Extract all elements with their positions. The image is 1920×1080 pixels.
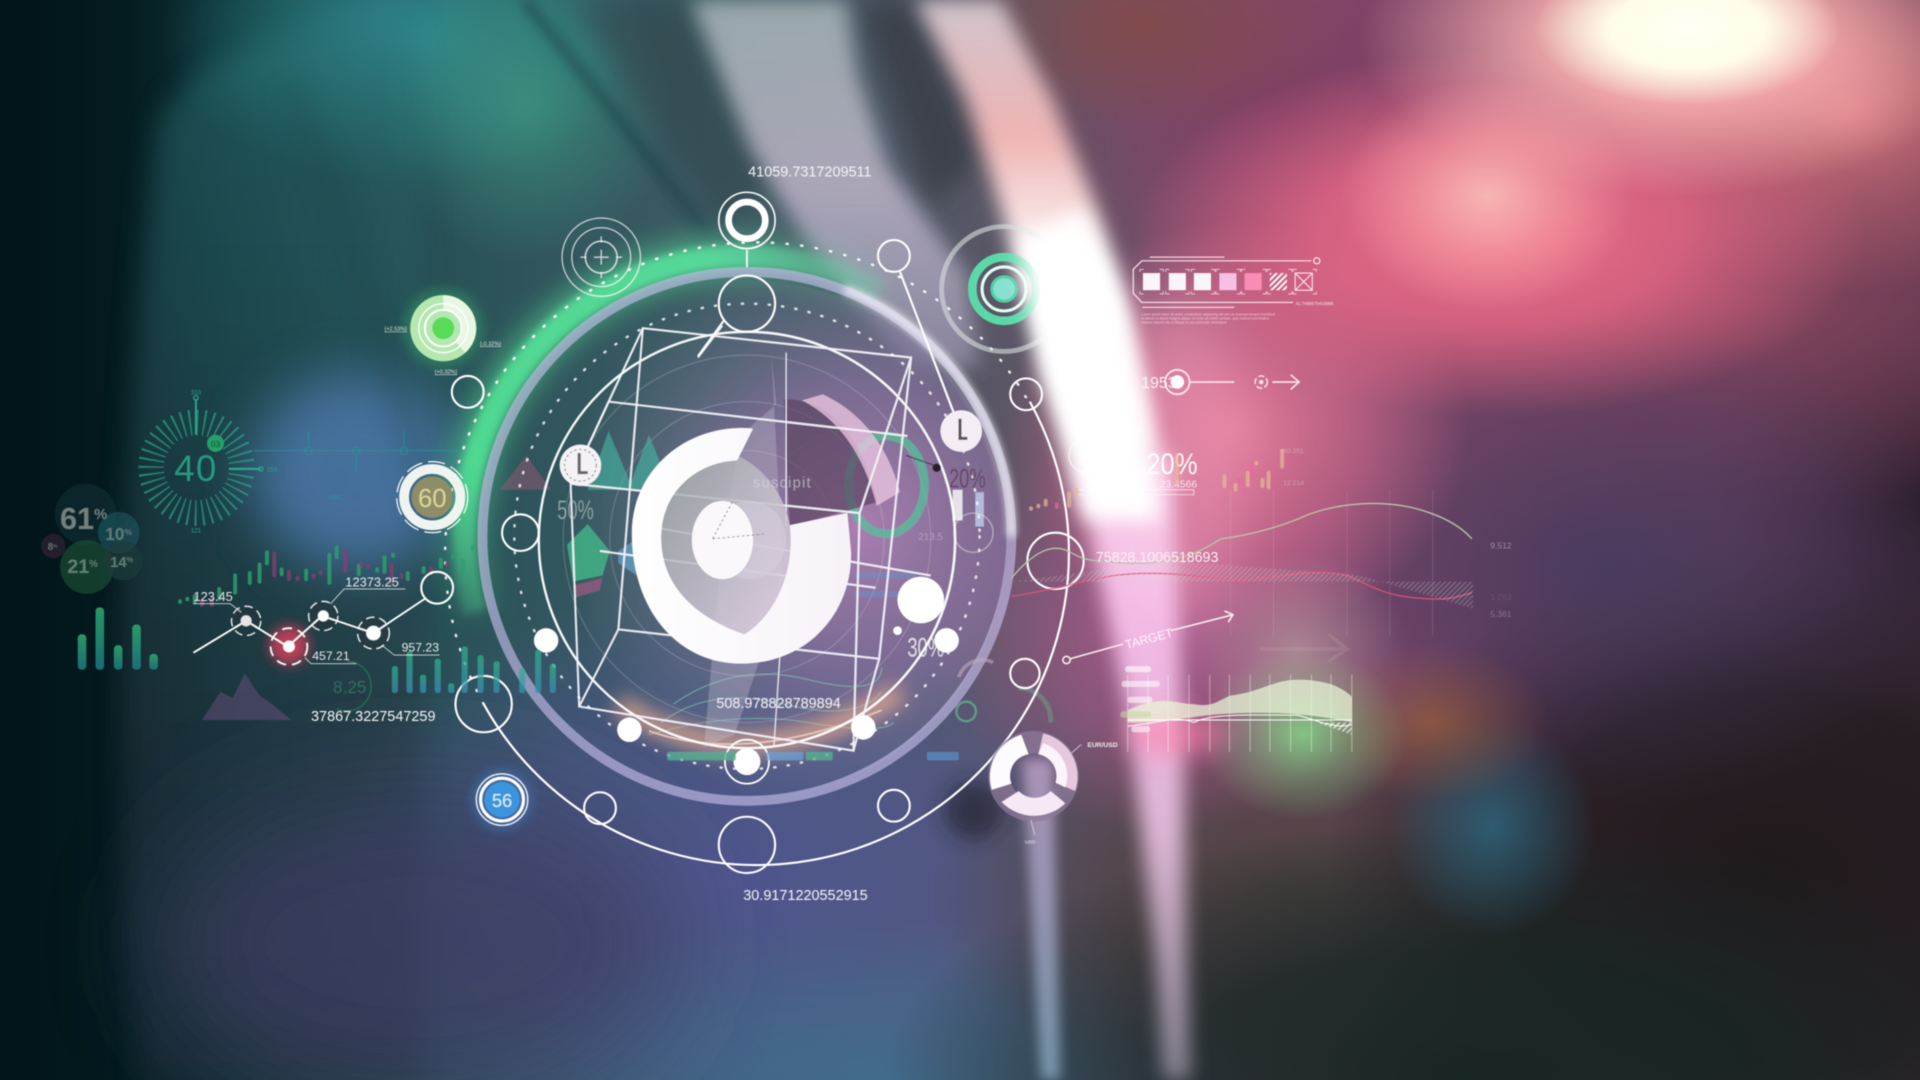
panel caption lines — [1141, 312, 1275, 324]
concentric inner guide rings — [563, 355, 931, 722]
line chart scale labels — [1490, 541, 1512, 619]
green target badge: (-0.32%) — [480, 341, 501, 347]
candle scale labels: 60.251 — [1283, 448, 1304, 455]
solid lower orbit arc — [484, 402, 1069, 865]
marker axis — [253, 431, 459, 471]
inner labels: 20% — [949, 463, 986, 493]
green target badge: (+0.32%) — [435, 369, 457, 375]
percentage bubbles: 14 — [110, 555, 127, 571]
wedge behind the swirl — [784, 399, 878, 527]
line chart value labels: 123.45 — [193, 589, 233, 604]
radial gauge 40: 253 — [267, 466, 278, 473]
inner labels: 50% — [557, 495, 594, 525]
donut chart — [990, 733, 1118, 846]
percentage bubbles: 61 — [60, 502, 94, 536]
concentric target, right — [942, 227, 1067, 351]
target arrow: TARGET — [1124, 626, 1175, 652]
left widgets — [41, 289, 556, 829]
blue badge 56 — [473, 770, 531, 829]
ring interior tint — [487, 280, 1007, 800]
candle scale labels — [1283, 448, 1304, 487]
area chart with grid — [1120, 666, 1352, 754]
dotted inner orbit — [514, 304, 980, 769]
wireframe cube — [571, 326, 931, 751]
percentage bubbles: % — [94, 507, 107, 523]
white 3D swirl — [632, 428, 851, 664]
dotted upper orbit — [445, 242, 1030, 704]
radial gauge 40: 40 — [174, 448, 218, 489]
multi-line area chart — [1011, 490, 1473, 637]
clock badge right — [906, 410, 982, 465]
green glowing arc — [464, 256, 879, 612]
orbit nodes — [452, 240, 1084, 873]
candlestick chart — [180, 547, 473, 605]
pointer row: 1953 — [1141, 375, 1177, 392]
crosshair target — [562, 218, 640, 296]
pointer row — [1141, 370, 1299, 394]
percentage bubbles: 10 — [105, 524, 124, 544]
percentage bubbles: 21 — [67, 556, 89, 578]
percentage bubbles — [41, 484, 143, 594]
small bar chart — [78, 607, 158, 670]
green target badge — [384, 289, 501, 375]
readout: top: 41059.7317209511 — [748, 164, 872, 180]
progress badge 60: 60 — [418, 485, 447, 513]
value 20 percent block: 20% — [1146, 448, 1198, 481]
inner labels: 213.5 — [918, 532, 943, 543]
white line chart — [193, 572, 453, 665]
lavender outer ring — [482, 272, 1011, 801]
bottom node ring — [725, 740, 769, 784]
swatch panel: 41.7456670415988 — [1296, 301, 1334, 306]
top target node — [719, 192, 775, 267]
candle scale labels: 12.214 — [1283, 480, 1304, 487]
readout: bottom inner: 508.978828789894 — [716, 696, 841, 712]
axis label: ABC — [328, 493, 344, 502]
value 20 percent block — [1069, 440, 1198, 495]
pink 3d pie slice — [802, 394, 900, 506]
line chart scale labels: 1.263 — [1490, 592, 1512, 602]
candles upper right — [1031, 451, 1282, 509]
inner labels — [557, 463, 986, 662]
readout: bottom: 30.9171220552915 — [743, 888, 868, 904]
blue badge 56: 56 — [492, 790, 512, 811]
percentage bubbles: % — [127, 555, 134, 564]
percentage bubbles: % — [53, 543, 58, 549]
line chart scale labels: 9.512 — [1490, 541, 1512, 551]
line chart value labels: 457.21 — [312, 649, 350, 663]
right widgets — [942, 211, 1512, 846]
swirl inner crescent — [661, 456, 796, 634]
panel caption lines: Lorem ipsum dolor sit amet, consectetur adipiscing elit sed do eiusmod tempor incididunt — [1141, 312, 1275, 316]
faded charts inside the ring — [500, 431, 1051, 735]
ghost arrow — [1260, 634, 1347, 661]
white data dots — [534, 577, 959, 775]
mountain area chart — [202, 673, 291, 720]
radial gauge 40: 121 — [191, 528, 202, 535]
teal bars right of line chart — [392, 647, 556, 693]
clock badge left — [560, 444, 601, 486]
line chart value labels: 957.23 — [402, 640, 439, 654]
line chart value labels: 12373.25 — [345, 575, 399, 590]
progress badge 60 — [397, 462, 468, 533]
line chart value labels: 37867.3227547259 — [311, 709, 435, 725]
green target badge: (+2.53%) — [384, 327, 407, 333]
central cylinder — [692, 501, 786, 579]
percentage bubbles: % — [124, 527, 132, 537]
target arrow — [1063, 611, 1233, 664]
readout beside node: 75828.1006518693 — [1096, 550, 1218, 566]
line chart scale labels: 5.361 — [1490, 609, 1512, 619]
line chart value labels — [193, 575, 439, 725]
orange glow at bottom of inner ring — [618, 692, 900, 744]
inner white ring — [539, 332, 955, 748]
radial gauge 40: 03 — [211, 439, 221, 449]
suit sleeve and shirt — [120, 0, 1249, 1080]
inner labels: 30% — [907, 632, 944, 662]
gauge 8.25: 8.25 — [333, 677, 366, 697]
bright flare over target — [1019, 211, 1161, 520]
inner labels: suscipit — [753, 475, 812, 491]
red glow — [269, 626, 309, 665]
donut chart: USD — [1025, 840, 1036, 846]
radial gauge 40: 310 — [191, 389, 202, 396]
swatch panel — [1133, 257, 1334, 307]
panel caption lines: ullamco laboris nisi ut aliquip ex ea commodo consequat — [1141, 320, 1226, 324]
bright flare on ring upper right — [845, 289, 1011, 536]
donut chart: EUR/USD — [1087, 742, 1118, 749]
radial gauge 40 — [151, 389, 278, 535]
pill labels under ring — [667, 752, 959, 760]
grey translucent panel — [704, 355, 784, 747]
value 20 percent block: 23.4566 — [1160, 479, 1197, 490]
percentage bubbles: 8 — [48, 542, 53, 553]
gauge 8.25 — [333, 661, 371, 711]
percentage bubbles: % — [89, 559, 98, 570]
main circular HUD — [445, 164, 1084, 904]
panel caption lines: ut labore et dolore magna aliqua. Ut enim ad minim veniam, quis nostrud exercitation — [1141, 316, 1269, 320]
